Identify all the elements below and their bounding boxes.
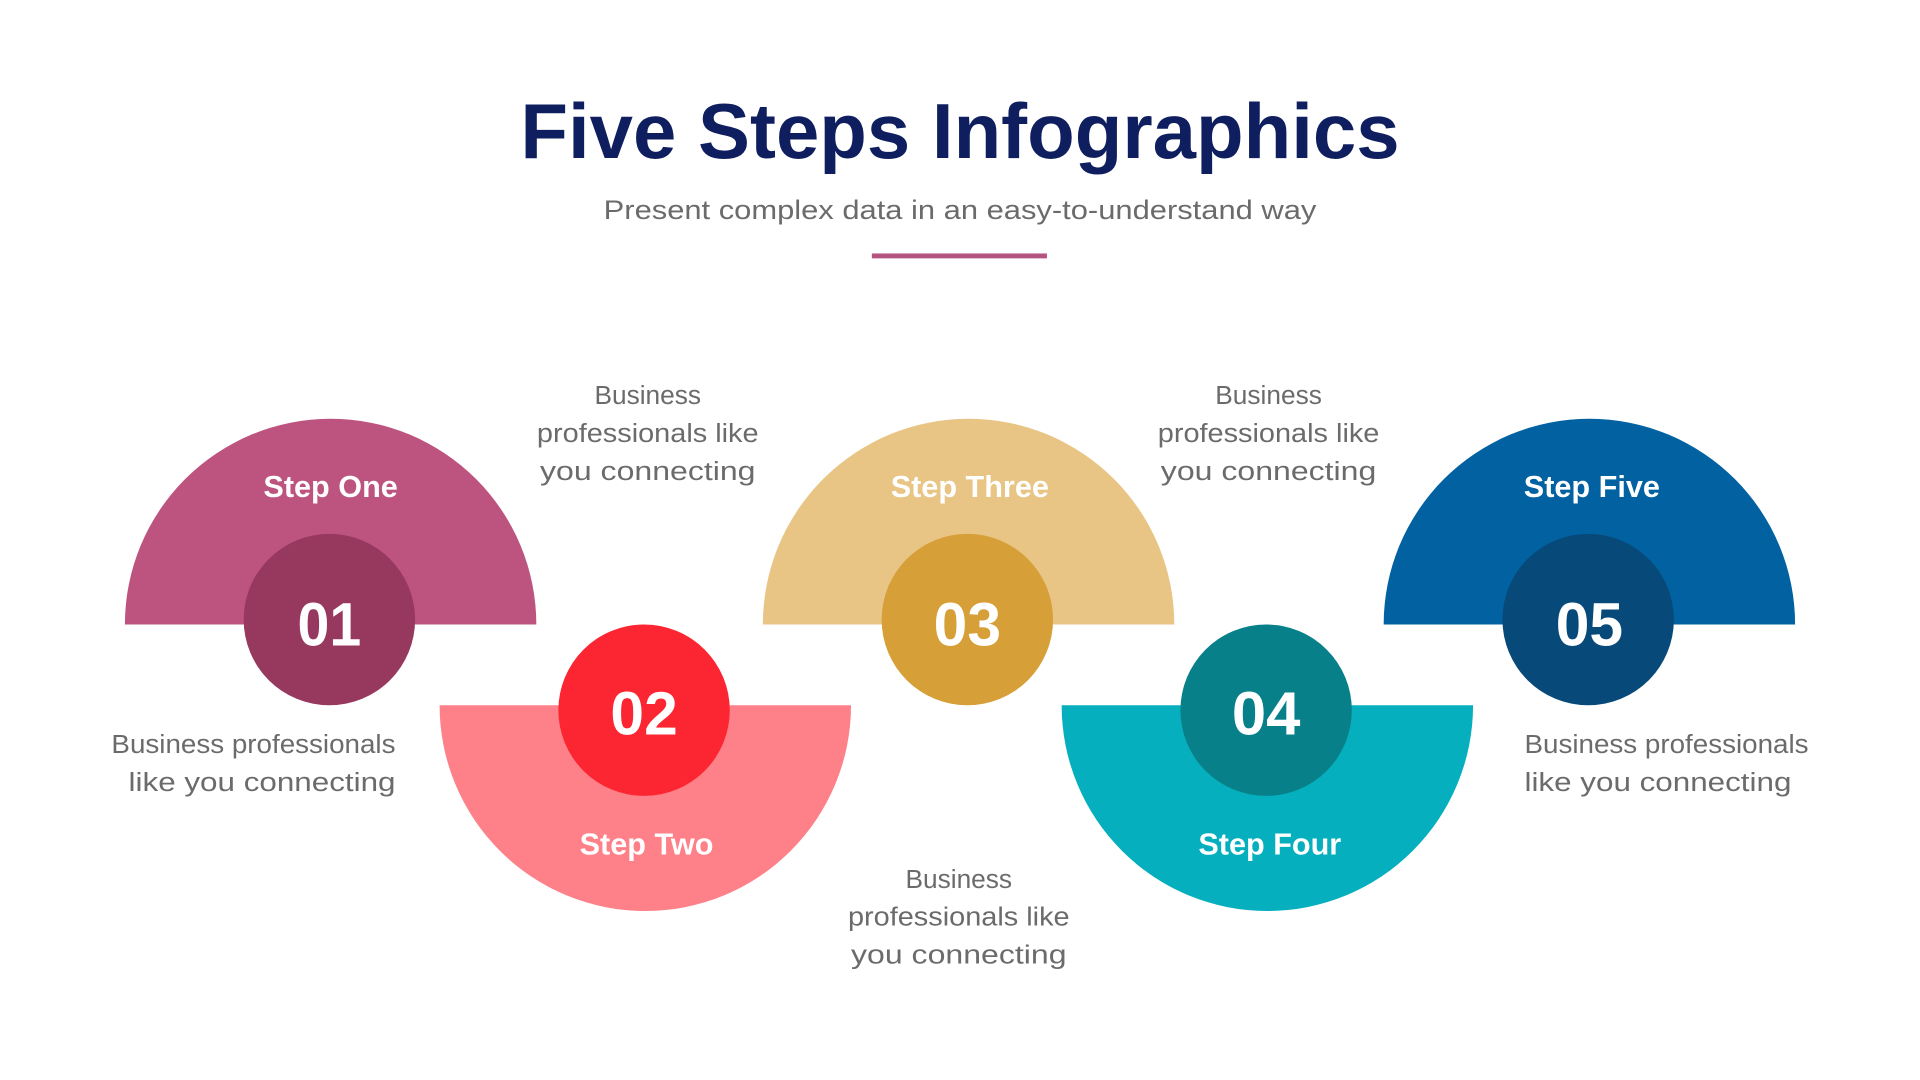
step 1: 01 <box>298 590 361 658</box>
subtitle: Present complex data in an easy-to-understand way <box>604 195 1317 225</box>
text: step 4 description <box>1158 382 1379 486</box>
text: step 1 description <box>111 731 396 797</box>
text: step 3 description: professionals like <box>848 904 1070 932</box>
step 2: 02 <box>610 680 678 748</box>
title: Five Steps Infographics <box>520 87 1400 175</box>
text: step 1 description: Business professionals <box>111 731 396 759</box>
text: step 5 description <box>1524 731 1809 797</box>
step 1 <box>125 419 536 705</box>
text: step 1 description: like you connecting <box>129 769 396 797</box>
step 4 <box>1062 624 1473 911</box>
step 5: 05 <box>1556 590 1623 658</box>
step 4: 04 <box>1232 680 1300 748</box>
text: step 4 description: Business <box>1215 382 1322 410</box>
text: step 2 description: Business <box>594 382 701 410</box>
text: step 3 description: you connecting <box>851 942 1067 970</box>
text: step 4 description: professionals like <box>1158 420 1379 448</box>
text: step 3 description: Business <box>906 866 1012 894</box>
step 3: Step Three <box>891 470 1049 504</box>
text: step 4 description: you connecting <box>1161 458 1376 486</box>
step 2: Step Two <box>580 828 713 862</box>
text: step 2 description <box>537 382 759 486</box>
step 5: Step Five <box>1524 470 1660 504</box>
text: step 2 description: professionals like <box>537 420 759 448</box>
step 5 <box>1384 419 1795 705</box>
text: step 3 description <box>848 866 1070 970</box>
text: step 5 description: like you connecting <box>1524 769 1791 797</box>
step 2 <box>440 624 851 911</box>
underline accent <box>872 253 1047 258</box>
step 3: 03 <box>934 590 1001 658</box>
text: step 2 description: you connecting <box>540 458 756 486</box>
step 3 <box>763 419 1174 705</box>
step 4: Step Four <box>1198 828 1341 862</box>
step 1: Step One <box>263 470 398 504</box>
text: step 5 description: Business professionals <box>1524 731 1809 759</box>
